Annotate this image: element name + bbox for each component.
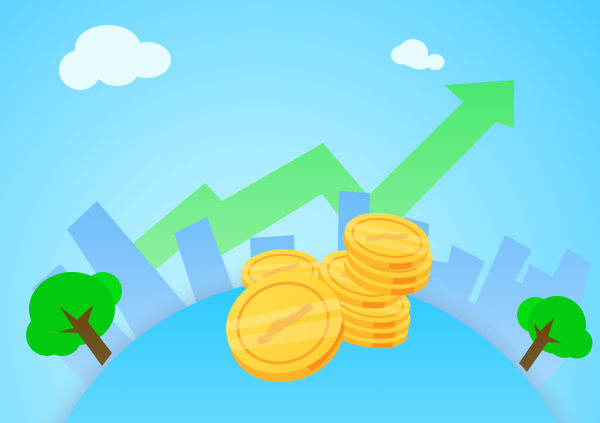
building: behind coins	[400, 217, 429, 300]
cloud right	[391, 39, 444, 70]
building: tall left	[67, 201, 192, 345]
planet halo	[32, 249, 590, 423]
building: centre tall	[337, 191, 370, 285]
trunk	[519, 318, 561, 372]
green growth arrow	[133, 80, 514, 272]
dollar sign	[258, 306, 312, 341]
cloud left	[59, 25, 171, 90]
back coin	[239, 247, 324, 301]
foliage	[517, 296, 592, 358]
building: back left	[32, 264, 140, 398]
left tree	[26, 272, 122, 366]
trunk	[58, 305, 112, 366]
coins	[226, 212, 433, 382]
foliage	[26, 272, 122, 356]
rear stack	[322, 299, 413, 354]
right tree	[517, 296, 592, 372]
large front coin	[226, 272, 345, 382]
building: lean left	[174, 217, 238, 315]
front stack	[338, 233, 436, 302]
building: centre low	[250, 235, 296, 290]
planet	[65, 278, 557, 423]
buildings: right skyline	[415, 235, 591, 400]
skyline buildings	[32, 191, 591, 400]
